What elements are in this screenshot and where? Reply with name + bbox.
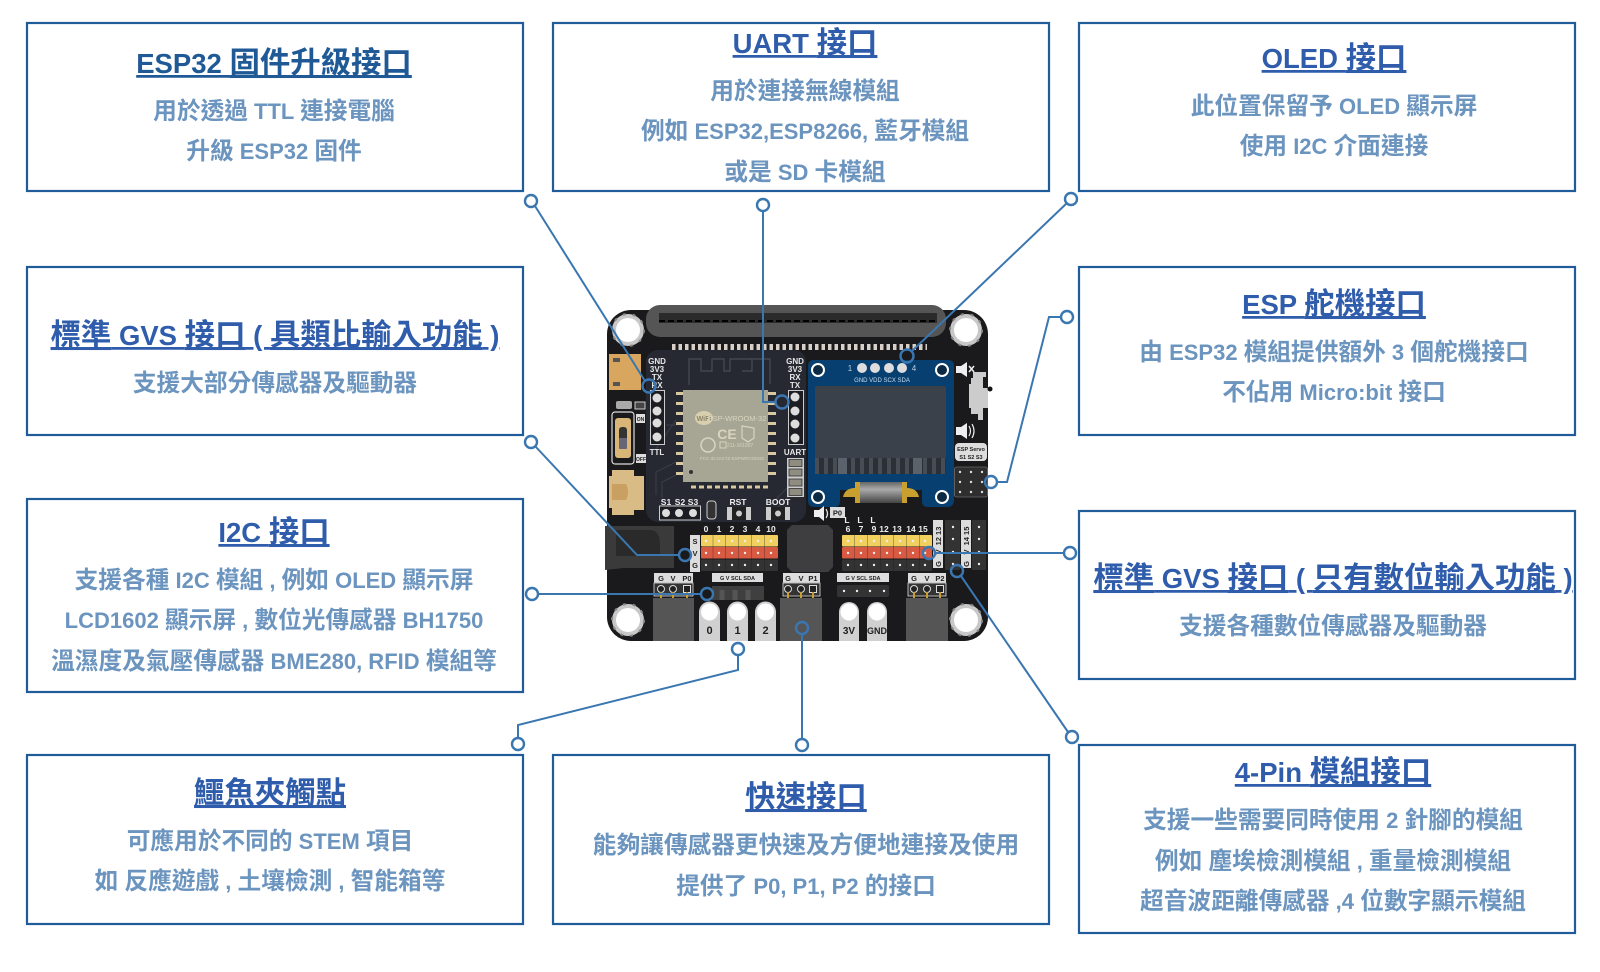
I2C header left: G V SCL SDA bbox=[720, 576, 755, 582]
UART header: 3V3 bbox=[788, 365, 803, 374]
text: I2C description: 支援各種 I2C 模組 , 例如 OLED 顯示屏 bbox=[75, 566, 473, 594]
antenna trace bbox=[689, 359, 770, 385]
text: I2C description bbox=[51, 566, 497, 675]
ESP32 module: 211-161007 bbox=[727, 443, 753, 449]
text: servo description bbox=[1139, 339, 1529, 406]
text: ESP32 firmware description bbox=[153, 98, 395, 165]
power switch: OFF bbox=[636, 457, 646, 463]
TTL header: 3V3 bbox=[650, 365, 665, 374]
heading: alligator clip contacts: 鱷魚夾觸點 bbox=[194, 776, 346, 810]
micro:bit slot bbox=[646, 305, 946, 337]
4-pin module columns: V bbox=[934, 549, 943, 555]
text: 4-pin description: 例如 塵埃檢測模組 , 重量檢測模組 bbox=[1155, 847, 1511, 875]
JST battery connector bbox=[609, 354, 641, 390]
heading: UART port: UART 接口 bbox=[733, 26, 877, 60]
RST and BOOT buttons: RST bbox=[730, 497, 747, 507]
connector: alligator clips bbox=[512, 643, 744, 750]
text: alligator description bbox=[95, 827, 445, 895]
GVS digital pin block: L bbox=[857, 515, 863, 525]
ESP32 module: ESP-WROOM-32 bbox=[708, 414, 766, 423]
GVS analog pin block bbox=[690, 524, 778, 572]
heading: 4-pin module port: 4-Pin 模組接口 bbox=[1235, 755, 1431, 789]
connector: ESP32 firmware to TTL bbox=[525, 195, 656, 392]
text: quick port description bbox=[593, 831, 1019, 900]
quick port P1 bbox=[780, 573, 822, 641]
ESP32 module: CE bbox=[717, 426, 737, 442]
OLED module bbox=[808, 360, 954, 507]
UART header bbox=[784, 357, 806, 497]
text: UART description: 或是 SD 卡模組 bbox=[724, 159, 886, 186]
text: I2C description: 溫濕度及氣壓傳感器 BME280, RFID 模組等 bbox=[51, 647, 497, 675]
panel: 4-pin module port bbox=[1079, 745, 1575, 933]
quick port P0: P0 bbox=[682, 574, 692, 583]
panel: standard GVS analog port bbox=[27, 267, 523, 435]
GVS digital pin block: 9 bbox=[872, 524, 877, 534]
4-pin module columns bbox=[933, 520, 986, 570]
text: OLED description: 此位置保留予 OLED 顯示屏 bbox=[1191, 92, 1477, 120]
I2C header left bbox=[712, 573, 764, 600]
TTL header: GND bbox=[648, 357, 666, 366]
S1 S2 S3 header: S1 bbox=[661, 497, 671, 507]
UART header: UART bbox=[784, 448, 806, 457]
text: I2C description: LCD1602 顯示屏 , 數位光傳感器 BH1750 bbox=[65, 606, 483, 634]
S1 S2 S3 header: S3 bbox=[688, 497, 698, 507]
text: OLED description bbox=[1191, 92, 1477, 160]
text: UART description: 例如 ESP32,ESP8266, 藍牙模組 bbox=[641, 118, 969, 145]
panel: I2C port bbox=[27, 499, 523, 692]
speaker icons bbox=[814, 362, 974, 521]
panel: OLED port bbox=[1079, 23, 1575, 191]
heading: standard GVS analog port: 標準 GVS 接口 ( 具類比輸入功能 ) bbox=[51, 318, 499, 352]
power switch: ON bbox=[637, 417, 645, 423]
connector: OLED bbox=[900, 193, 1077, 362]
text: OLED description: 使用 I2C 介面連接 bbox=[1240, 133, 1428, 160]
GVS analog pin block: 3 bbox=[743, 524, 748, 534]
GVS digital pin block: 6 bbox=[846, 524, 851, 534]
connector: I2C bbox=[526, 588, 713, 600]
ESP32 module: WiFi bbox=[697, 416, 711, 423]
text: quick port description: 能夠讓傳感器更快速及方便地連接及使用 bbox=[593, 831, 1019, 859]
connector: ESP servo bbox=[985, 311, 1073, 488]
UART header: TX bbox=[790, 381, 801, 390]
heading: OLED port: OLED 接口 bbox=[1262, 41, 1406, 75]
alligator clip pads: GND bbox=[867, 626, 888, 636]
text: servo description: 不佔用 Micro:bit 接口 bbox=[1222, 379, 1446, 406]
heading: ESP servo port: ESP 舵機接口 bbox=[1242, 287, 1426, 321]
I2C header right: G V SCL SDA bbox=[845, 576, 881, 582]
RST and BOOT buttons: BOOT bbox=[766, 497, 791, 507]
square chip bbox=[787, 525, 833, 572]
RST and BOOT buttons bbox=[727, 497, 791, 520]
heading: quick port: 快速接口 bbox=[745, 780, 867, 814]
GVS digital pin block: 7 bbox=[859, 524, 864, 534]
4-pin module columns: V bbox=[962, 549, 971, 555]
GVS analog pin block: 1 bbox=[717, 524, 722, 534]
text: alligator description: 如 反應遊戲 , 土壤檢測 , 智能箱等 bbox=[95, 867, 445, 895]
panel: ESP32 firmware port bbox=[27, 23, 523, 191]
connector: GVS analog bbox=[525, 436, 691, 561]
GVS digital pin block: 15 bbox=[918, 524, 928, 534]
alligator clip pads: 2 bbox=[762, 625, 769, 637]
GVS digital pin block: L bbox=[844, 515, 850, 525]
text: 4-pin description: 支援一些需要同時使用 2 針腳的模組 bbox=[1143, 807, 1523, 834]
panel: standard GVS digital port bbox=[1079, 511, 1575, 679]
text: GVS digital description: 支援各種數位傳感器及驅動器 bbox=[1179, 612, 1487, 640]
text: servo description: 由 ESP32 模組提供額外 3 個舵機接口 bbox=[1139, 339, 1529, 366]
power jack bbox=[605, 526, 674, 570]
text: 4-pin description: 超音波距離傳感器 ,4 位數字顯示模組 bbox=[1140, 887, 1526, 915]
ESP servo header: S1 S2 S3 bbox=[959, 455, 983, 461]
quick port P1: P1 bbox=[808, 574, 818, 583]
panel: UART port bbox=[553, 23, 1049, 191]
4-pin module columns: G bbox=[934, 561, 943, 567]
S1 S2 S3 header: S2 bbox=[675, 497, 685, 507]
heading: standard GVS digital port: 標準 GVS 接口 ( 只有數位輸入功能 ) bbox=[1093, 561, 1573, 595]
GVS analog pin block: G bbox=[692, 561, 698, 570]
text: ESP32 firmware description: 用於透過 TTL 連接電腦 bbox=[153, 98, 395, 125]
alligator clip pads: 0 bbox=[706, 625, 713, 637]
alligator clip pads: 1 bbox=[734, 625, 741, 637]
connector: 4-pin bbox=[951, 565, 1078, 743]
heading: I2C port: I2C 接口 bbox=[218, 515, 330, 549]
4-pin module columns: G bbox=[962, 561, 971, 567]
ESP32 carrier panel bbox=[646, 350, 806, 522]
power switch bbox=[612, 401, 646, 464]
text: UART description: 用於連接無線模組 bbox=[710, 77, 900, 105]
TTL header: TTL bbox=[650, 448, 664, 457]
GVS analog pin block: S bbox=[692, 537, 698, 546]
OLED module: GND VDD SCX SDA bbox=[854, 378, 910, 384]
quick port P2: P2 bbox=[935, 574, 945, 583]
ESP32 module bbox=[676, 390, 776, 487]
GVS analog pin block: 4 bbox=[756, 524, 761, 534]
GVS analog pin block: 0 bbox=[704, 524, 709, 534]
mounting holes bbox=[612, 314, 982, 636]
ESP servo header bbox=[954, 443, 988, 497]
TTL header: TX bbox=[652, 373, 663, 382]
connector: GVS digital bbox=[923, 547, 1076, 559]
panel: alligator clip contacts bbox=[27, 755, 523, 924]
I2C header right bbox=[837, 573, 889, 597]
text: GVS analog description: 支援大部分傳感器及驅動器 bbox=[133, 369, 417, 397]
GVS digital pin block: 14 bbox=[906, 524, 916, 534]
TTL header bbox=[648, 357, 666, 457]
text: 4-pin description bbox=[1140, 807, 1526, 915]
panel: ESP servo port bbox=[1079, 267, 1575, 435]
OLED module: 1 bbox=[848, 364, 853, 373]
GVS digital pin block: L bbox=[870, 515, 876, 525]
speaker icons: P0 bbox=[833, 508, 842, 518]
alligator clip pads: 3V bbox=[843, 626, 855, 637]
GVS digital pin block bbox=[842, 515, 932, 571]
quick port P2 bbox=[906, 573, 948, 641]
4-pin module columns: 12 13 bbox=[934, 527, 943, 545]
GVS analog pin block: 10 bbox=[766, 524, 776, 534]
ESP servo header: ESP Servo bbox=[957, 447, 985, 453]
quick port P2: G bbox=[911, 574, 917, 583]
GVS analog pin block: 2 bbox=[730, 524, 735, 534]
quick port P2: V bbox=[924, 574, 930, 583]
quick port P0 bbox=[653, 573, 694, 641]
connector: UART bbox=[757, 199, 788, 408]
quick port P1: G bbox=[785, 574, 791, 583]
OLED module: 4 bbox=[912, 364, 917, 373]
text: alligator description: 可應用於不同的 STEM 項目 bbox=[127, 827, 413, 855]
TTL header: RX bbox=[651, 381, 663, 390]
alligator clip pads bbox=[699, 602, 888, 641]
tan connector bbox=[609, 470, 644, 515]
GVS digital pin block: 12 bbox=[879, 524, 889, 534]
quick port P1: V bbox=[798, 574, 804, 583]
GVS digital pin block: 13 bbox=[892, 524, 902, 534]
UART header: GND bbox=[786, 357, 804, 366]
side switch bbox=[969, 372, 992, 420]
ESP32 module: FCC ID:2AC7Z-ESPWROOM32 bbox=[700, 456, 764, 461]
board: expansion board illustration bbox=[605, 305, 992, 641]
UART header: RX bbox=[789, 373, 801, 382]
quick port P0: V bbox=[670, 574, 676, 583]
connector: quick port bbox=[796, 622, 808, 751]
text: ESP32 firmware description: 升級 ESP32 固件 bbox=[186, 138, 362, 165]
heading: ESP32 firmware port: ESP32 固件升級接口 bbox=[136, 46, 412, 80]
quick port P0: G bbox=[658, 574, 664, 583]
panel: quick port bbox=[553, 755, 1049, 924]
GVS analog pin block: V bbox=[692, 549, 698, 558]
4-pin module columns: 14 15 bbox=[962, 527, 971, 545]
S1 S2 S3 header bbox=[660, 497, 716, 520]
text: quick port description: 提供了 P0, P1, P2 的接口 bbox=[676, 873, 936, 900]
text: UART description bbox=[641, 77, 969, 186]
